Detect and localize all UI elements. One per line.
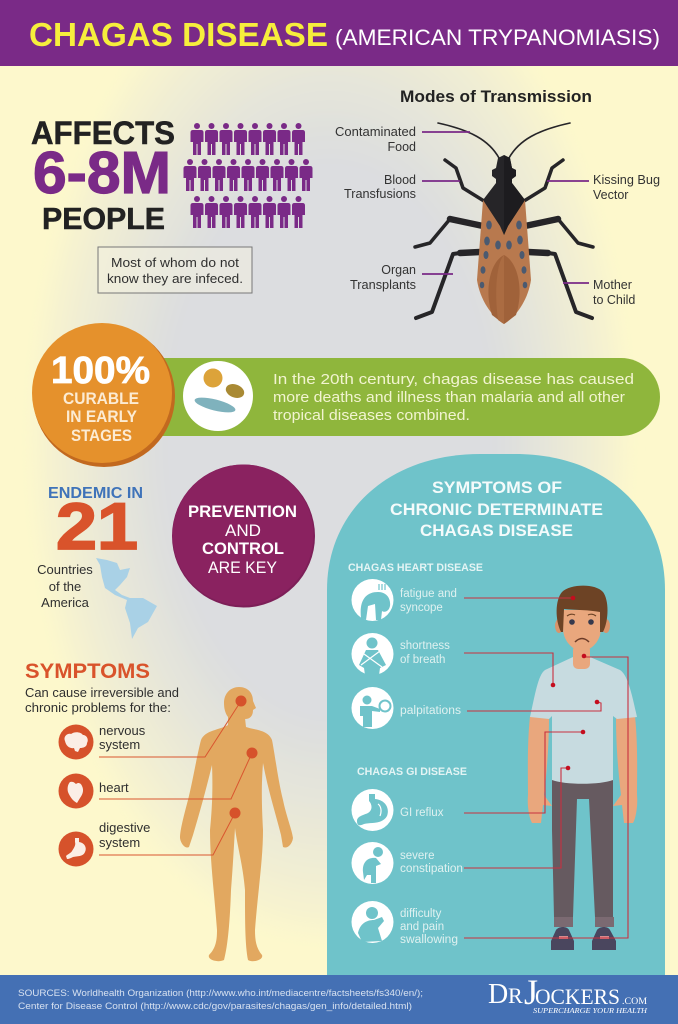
transmission labels: Transplants bbox=[350, 278, 416, 292]
transmission labels: Kissing Bug bbox=[593, 173, 660, 187]
endemic statistic: Countries bbox=[37, 562, 93, 577]
symptoms text block bbox=[25, 660, 179, 715]
green fact banner: tropical diseases combined. bbox=[273, 407, 470, 424]
affects statistic: AFFECTS bbox=[31, 115, 175, 151]
heading: modes of transmission: Modes of Transmission bbox=[400, 87, 592, 106]
symptom labels: syncope bbox=[400, 602, 443, 614]
transmission labels: Organ bbox=[381, 263, 416, 277]
note box: know they are infeced. bbox=[107, 271, 243, 286]
symptom leader lines and markers bbox=[464, 596, 628, 938]
green fact banner: In the 20th century, chagas disease has caused bbox=[273, 371, 634, 388]
orange curable circle: CURABLE bbox=[63, 389, 139, 408]
endemic statistic: ENDEMIC IN bbox=[48, 485, 143, 502]
man figure bbox=[528, 586, 637, 950]
symptoms text block: SYMPTOMS bbox=[25, 660, 150, 683]
orange curable circle: IN EARLY bbox=[66, 407, 138, 426]
sources: SOURCES: Worldhealth Organization (http://www.who.int/mediacentre/factsheets/fs340/en/); bbox=[18, 988, 423, 999]
icon: shortness of breath bbox=[352, 633, 394, 675]
green fact banner: more deaths and illness than malaria and all other bbox=[273, 389, 625, 406]
body figure bbox=[180, 687, 293, 961]
kissing bug illustration bbox=[415, 123, 593, 324]
purple prevention circle bbox=[172, 464, 315, 608]
transmission labels: Transfusions bbox=[344, 187, 416, 201]
icon: parasites bbox=[183, 361, 253, 431]
endemic statistic bbox=[37, 485, 143, 610]
transmission labels: Vector bbox=[593, 188, 628, 202]
gi disease subheading: CHAGAS GI DISEASE bbox=[357, 766, 467, 778]
note box: Most of whom do not bbox=[111, 255, 239, 270]
symptom labels: palpitations bbox=[400, 705, 461, 717]
transmission labels: to Child bbox=[593, 293, 635, 307]
endemic statistic: America bbox=[41, 595, 90, 610]
map of the americas bbox=[96, 558, 157, 639]
orange curable circle: STAGES bbox=[71, 426, 132, 445]
logo: R bbox=[508, 983, 523, 1008]
green fact banner bbox=[100, 358, 660, 436]
affects statistic bbox=[31, 115, 175, 236]
orange curable circle: 100% bbox=[51, 350, 150, 392]
purple prevention circle: PREVENTION bbox=[188, 502, 297, 521]
orange curable circle bbox=[32, 323, 175, 467]
logo: OCKERS bbox=[535, 984, 620, 1009]
organ labels bbox=[99, 723, 150, 850]
transmission labels: Food bbox=[388, 140, 416, 154]
organ markers and leader lines bbox=[99, 696, 258, 855]
organ labels: system bbox=[99, 835, 140, 850]
heart disease subheading: CHAGAS HEART DISEASE bbox=[348, 562, 483, 574]
logo: .COM bbox=[622, 997, 648, 1007]
symptom labels: GI reflux bbox=[400, 807, 444, 819]
symptom labels: fatigue and bbox=[400, 588, 457, 600]
title: CHAGAS DISEASE bbox=[29, 16, 328, 53]
affects statistic: PEOPLE bbox=[42, 201, 165, 236]
symptom labels bbox=[400, 588, 463, 946]
purple prevention circle: ARE KEY bbox=[208, 558, 277, 577]
organ labels: system bbox=[99, 737, 140, 752]
endemic statistic: of the bbox=[49, 579, 81, 594]
note box bbox=[98, 247, 252, 293]
transmission labels: Contaminated bbox=[335, 125, 416, 139]
transmission labels bbox=[335, 125, 660, 307]
symptoms text block: Can cause irreversible and bbox=[25, 685, 179, 700]
icon: palpitations bbox=[352, 687, 394, 729]
panel heading: CHRONIC DETERMINATE bbox=[390, 500, 603, 519]
people pictogram bbox=[184, 123, 312, 228]
endemic statistic: 21 bbox=[56, 489, 138, 563]
icon: heart bbox=[58, 774, 94, 808]
header banner bbox=[0, 0, 678, 66]
logo: J bbox=[524, 972, 538, 1012]
transmission labels: Mother bbox=[593, 278, 632, 292]
sources bbox=[18, 988, 423, 1012]
symptom labels: severe bbox=[400, 850, 435, 862]
panel heading bbox=[390, 478, 603, 540]
icon: brain bbox=[58, 724, 94, 760]
purple prevention circle: CONTROL bbox=[202, 539, 284, 558]
logo: SUPERCHARGE YOUR HEALTH bbox=[533, 1006, 648, 1015]
logo: D bbox=[488, 979, 508, 1010]
symptom labels: shortness bbox=[400, 640, 450, 652]
symptom labels: difficulty bbox=[400, 908, 442, 920]
organ labels: digestive bbox=[99, 820, 150, 835]
subtitle: (AMERICAN TRYPANOMIASIS) bbox=[335, 25, 660, 50]
icon: difficulty swallowing bbox=[352, 901, 394, 943]
symptom labels: and pain bbox=[400, 921, 444, 933]
symptom labels: swallowing bbox=[400, 934, 458, 946]
symptom labels: constipation bbox=[400, 863, 463, 875]
footer bar bbox=[0, 972, 678, 1024]
panel: chronic symptoms bbox=[327, 454, 665, 975]
symptoms text block: chronic problems for the: bbox=[25, 700, 171, 715]
icon: gi reflux bbox=[352, 789, 394, 831]
symptom labels: of breath bbox=[400, 654, 445, 666]
icon: stomach bbox=[58, 832, 94, 866]
organ labels: heart bbox=[99, 780, 129, 795]
affects statistic: 6-8M bbox=[33, 140, 171, 206]
purple prevention circle: AND bbox=[225, 521, 261, 540]
transmission labels: Blood bbox=[384, 173, 416, 187]
sources: Center for Disease Control (http://www.cdc/gov/parasites/chagas/gen_info/detailed.html) bbox=[18, 1001, 412, 1012]
panel heading: CHAGAS DISEASE bbox=[420, 521, 573, 540]
panel heading: SYMPTOMS OF bbox=[432, 478, 562, 497]
organ labels: nervous bbox=[99, 723, 146, 738]
logo bbox=[488, 972, 648, 1015]
icon: severe constipation bbox=[352, 842, 394, 884]
icon: fatigue bbox=[352, 579, 394, 621]
